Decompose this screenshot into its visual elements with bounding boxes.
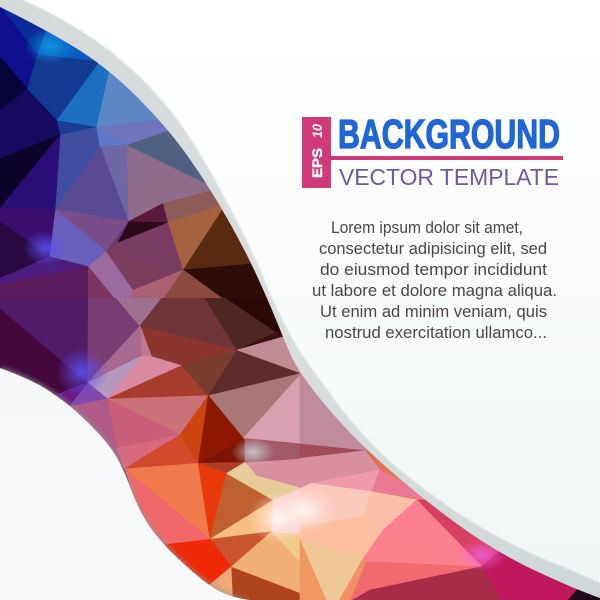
- body text: nostrud exercitation ullamco...: [325, 323, 547, 342]
- body text: [312, 218, 557, 342]
- body text: consectetur adipisicing elit, sed: [319, 239, 547, 258]
- body text: do eiusmod tempor incididunt: [320, 260, 547, 279]
- EPS badge: 10: [309, 124, 325, 138]
- lower-left white panel: [0, 368, 250, 600]
- EPS badge: EPS: [309, 148, 325, 178]
- body text: Ut enim ad minim veniam, quis: [320, 302, 547, 321]
- title block: [302, 111, 563, 190]
- subheading: vector template: VECTOR TEMPLATE: [339, 164, 559, 190]
- upper facets: blue and violet: [0, 0, 277, 302]
- lower-left facets: purple, red and orange: [0, 298, 302, 600]
- lower-left edge shadow: [1, 366, 251, 598]
- lower-right facets: pink and peach: [300, 350, 600, 600]
- body text: Lorem ipsum dolor sit amet,: [331, 218, 523, 237]
- light glows: [23, 28, 506, 571]
- divider rule: [330, 156, 563, 160]
- body text: ut labore et dolore magna aliqua.: [312, 281, 557, 300]
- EPS badge: [302, 117, 331, 188]
